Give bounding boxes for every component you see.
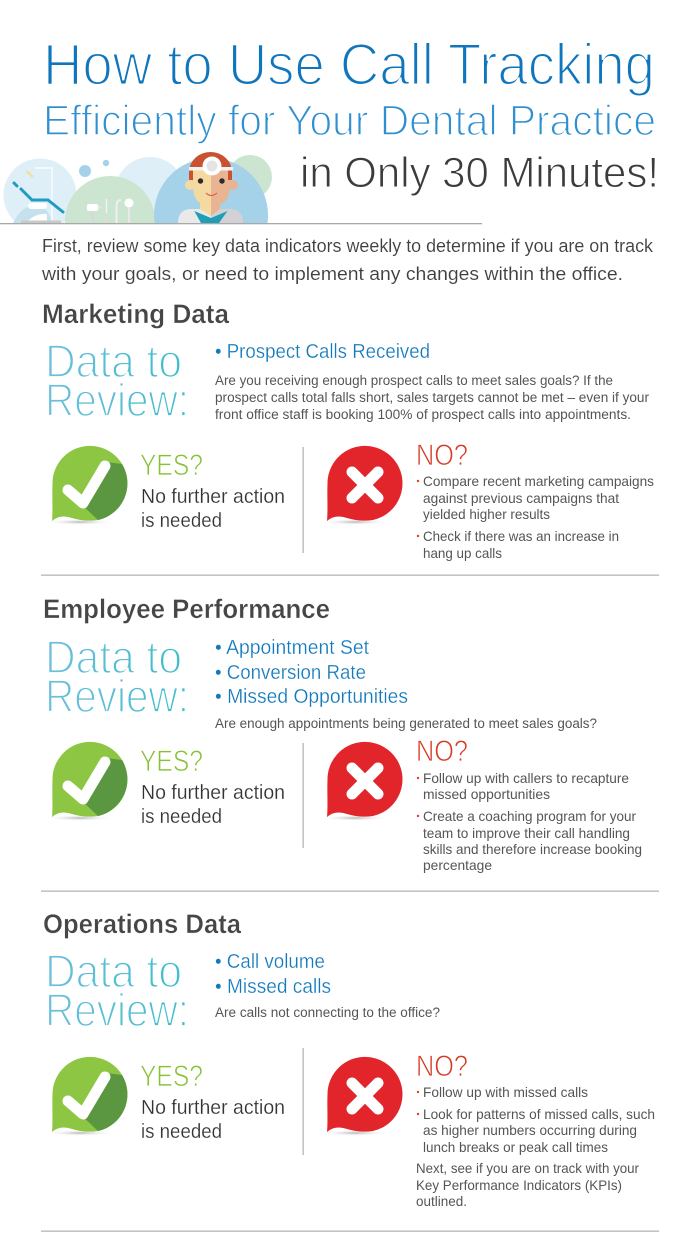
yes text: is needed	[141, 805, 222, 828]
no text	[416, 1050, 655, 1155]
no text: lunch breaks or peak call times	[423, 1139, 608, 1155]
description: Are enough appointments being generated to meet sales goals?	[215, 716, 597, 731]
description: front office staff is booking 100% of prospect calls into appointments.	[215, 407, 631, 422]
no text	[416, 439, 654, 561]
title: in Only 30 Minutes!	[300, 149, 659, 197]
red x bubble	[321, 742, 402, 821]
yes text: YES?	[140, 449, 203, 482]
data list: • Call volume	[215, 951, 325, 973]
intro text: with your goals, or need to implement any changes within the office.	[41, 264, 623, 284]
header rule	[0, 223, 482, 224]
description	[215, 373, 650, 422]
intro text: First, review some key data indicators weekly to determine if you are on track	[42, 236, 654, 256]
data to review label: Data to	[45, 335, 182, 387]
icon: green check bubble	[46, 1057, 127, 1136]
icon: dental tools	[87, 198, 134, 223]
data to review label: Data to	[45, 945, 182, 997]
no text: skills and therefore increase booking	[423, 841, 642, 857]
yes text: No further action	[141, 485, 285, 508]
data to review label	[45, 335, 189, 426]
description: Are you receiving enough prospect calls to meet sales goals? If the	[215, 373, 613, 388]
no text: as higher numbers occurring during	[423, 1122, 637, 1138]
no text: percentage	[423, 857, 492, 873]
yes text: YES?	[140, 745, 203, 778]
no text: NO?	[416, 439, 468, 472]
yes text: YES?	[140, 1060, 203, 1093]
data to review label	[45, 631, 189, 722]
title: How to Use Call Tracking	[43, 32, 655, 98]
data list: • Appointment Set	[215, 637, 369, 659]
yes text: is needed	[141, 509, 222, 532]
intro text	[41, 236, 654, 284]
data to review label: Review:	[45, 374, 189, 426]
next steps text: Next, see if you are on track with your	[416, 1160, 639, 1176]
description: Are calls not connecting to the office?	[215, 1005, 440, 1020]
data list: • Conversion Rate	[215, 662, 366, 684]
yes text: No further action	[141, 781, 285, 804]
data list: • Missed Opportunities	[215, 686, 408, 708]
data to review label: Data to	[45, 631, 182, 683]
no text: Compare recent marketing campaigns	[423, 473, 654, 489]
next steps text: Key Performance Indicators (KPIs)	[416, 1177, 622, 1193]
panel: marketing data	[42, 299, 654, 561]
data to review label: Review:	[45, 984, 189, 1036]
no text: Create a coaching program for your	[423, 808, 636, 824]
description: prospect calls total falls short, sales targets cannot be met – even if your	[215, 390, 650, 405]
red x bubble	[321, 446, 402, 525]
heading: employee performance: Employee Performance	[43, 594, 330, 624]
no text: missed opportunities	[423, 786, 550, 802]
yes text: is needed	[141, 1120, 222, 1143]
no text: hang up calls	[423, 545, 502, 561]
yes text: No further action	[141, 1096, 285, 1119]
panel: employee performance	[43, 594, 642, 873]
data list	[215, 637, 408, 708]
icon: dental chair	[13, 168, 63, 223]
no text: Look for patterns of missed calls, such	[423, 1106, 655, 1122]
next steps text: outlined.	[416, 1193, 467, 1209]
data list	[215, 951, 331, 998]
no text: team to improve their call handling	[423, 825, 630, 841]
no text: Follow up with missed calls	[423, 1084, 588, 1100]
yes text	[140, 449, 285, 532]
no text: NO?	[416, 735, 468, 768]
heading: marketing data: Marketing Data	[42, 299, 230, 329]
title	[43, 32, 659, 197]
data list: • Missed calls	[215, 976, 331, 998]
icon: dentist	[178, 152, 243, 223]
red x bubble	[321, 1057, 402, 1136]
no text: against previous campaigns that	[423, 490, 619, 506]
data to review label: Review:	[45, 670, 189, 722]
no text	[416, 735, 642, 873]
next steps text	[416, 1160, 639, 1209]
no text: Follow up with callers to recapture	[423, 770, 629, 786]
no text: Check if there was an increase in	[423, 528, 619, 544]
panel: operations data	[43, 909, 655, 1209]
icon: green check bubble	[46, 446, 127, 525]
title: Efficiently for Your Dental Practice	[43, 97, 656, 145]
yes text	[140, 1060, 285, 1143]
no text: yielded higher results	[423, 506, 550, 522]
heading: operations data: Operations Data	[43, 909, 242, 939]
no text: NO?	[416, 1050, 468, 1083]
data list: • Prospect Calls Received	[215, 341, 430, 363]
illustration: dentist and dental tools	[4, 152, 272, 223]
icon: green check bubble	[46, 742, 127, 821]
data to review label	[45, 945, 189, 1036]
yes text	[140, 745, 285, 828]
